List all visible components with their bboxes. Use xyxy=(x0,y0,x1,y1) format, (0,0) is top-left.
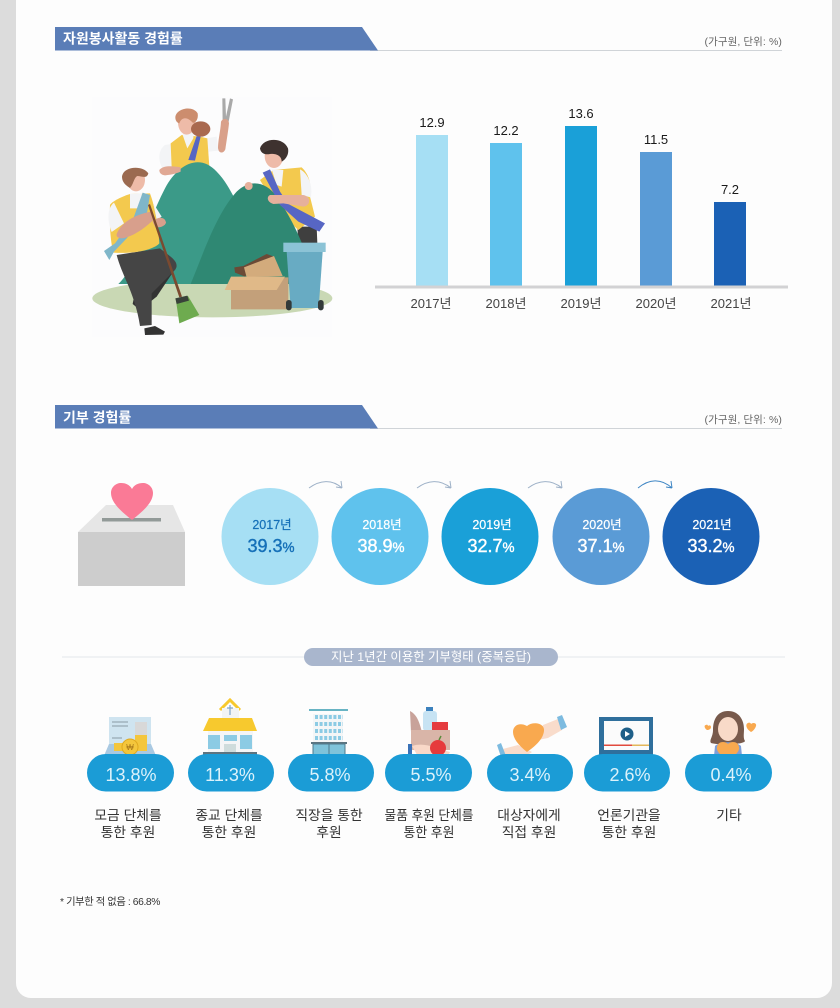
donation type labels: 언론기관을 xyxy=(597,808,661,823)
heading: donation experience rate: 기부 경험률 xyxy=(63,410,131,426)
icon: media screen xyxy=(599,717,653,757)
cardboard boxes xyxy=(225,254,288,309)
circle 2019: 2019년 xyxy=(472,518,512,532)
bar chart: volunteer rate by year xyxy=(375,106,788,311)
value labels: 12.2 xyxy=(493,123,519,138)
donation type labels: 직접 후원 xyxy=(502,825,556,840)
donation type labels: 대상자에게 xyxy=(497,808,561,823)
circle 2017 xyxy=(222,488,318,585)
year labels: 2018년 xyxy=(486,296,526,311)
volunteer: right man body xyxy=(260,140,317,243)
heading: donation experience rate: (가구원, 단위: %) xyxy=(704,413,782,426)
circle 2019: 32.7% xyxy=(467,536,515,556)
year labels xyxy=(411,296,751,311)
heading: donation experience rate xyxy=(55,405,782,428)
donation type pills with percentages: 13.8% xyxy=(105,765,157,785)
donation type labels: 직장을 통한 xyxy=(295,808,363,823)
icon: direct giving hands with heart xyxy=(497,715,567,760)
value labels: 12.9 xyxy=(419,115,445,130)
donation type pills with percentages: 2.6% xyxy=(609,765,651,785)
mound: back trash heap xyxy=(118,162,257,284)
donation type pills with percentages: 3.4% xyxy=(509,765,551,785)
circle 2018: 38.9% xyxy=(357,536,405,556)
mound: front trash heap xyxy=(191,183,303,284)
icon: other, woman with heart xyxy=(705,711,756,760)
donation type labels: 후원 xyxy=(316,825,342,840)
circle 2020: 2020년 xyxy=(582,518,622,532)
year labels: 2020년 xyxy=(636,296,676,311)
arrows between years xyxy=(309,481,672,488)
heading: volunteer experience rate: (가구원, 단위: %) xyxy=(704,35,782,48)
footnote: * 기부한 적 없음 : 66.8% xyxy=(60,895,160,908)
year labels: 2021년 xyxy=(711,296,751,311)
volunteer: top woman xyxy=(159,98,233,177)
recycling bin xyxy=(283,243,326,310)
icon: donation box with heart xyxy=(78,483,185,586)
volunteer: right man sash and arms xyxy=(245,169,325,232)
circle 2019 xyxy=(442,488,538,585)
donation type pills with percentages: 5.8% xyxy=(309,765,351,785)
subheading: donation types: 지난 1년간 이용한 기부형태 (중복응답) xyxy=(331,650,531,664)
bars xyxy=(416,126,746,286)
circle 2021 xyxy=(662,488,760,585)
circle 2017: 2017년 xyxy=(252,518,292,532)
icon: goods donation bag xyxy=(408,707,450,760)
illustration: volunteers cleaning up xyxy=(92,97,332,337)
donation type pills with percentages xyxy=(87,754,772,792)
donation type labels: 통한 후원 xyxy=(602,825,656,840)
value labels: 13.6 xyxy=(568,106,594,121)
year labels: 2019년 xyxy=(561,296,601,311)
donation type labels: 통한 후원 xyxy=(202,825,256,840)
circles: donation rate by year xyxy=(222,488,760,585)
icon: church xyxy=(203,700,257,756)
circle 2021: 33.2% xyxy=(687,536,735,556)
donation type labels: 기타 xyxy=(716,808,742,823)
volunteer: left man with broom xyxy=(104,168,199,335)
circle 2020 xyxy=(552,488,650,585)
donation type pills with percentages: 11.3% xyxy=(205,765,255,785)
donation type labels: 물품 후원 단체를 xyxy=(384,808,474,823)
icon: fundraising organization xyxy=(103,717,157,758)
heading: volunteer experience rate xyxy=(55,27,782,50)
donation type labels xyxy=(94,808,742,840)
donation type pills with percentages: 0.4% xyxy=(710,765,752,785)
donation type labels: 종교 단체를 xyxy=(195,808,263,823)
donation type labels: 모금 단체를 xyxy=(94,808,162,823)
circle 2018: 2018년 xyxy=(362,518,402,532)
donation type pills with percentages: 5.5% xyxy=(410,765,452,785)
circle 2017: 39.3% xyxy=(247,536,295,556)
value labels: 11.5 xyxy=(644,132,668,147)
volunteer hand on heap xyxy=(159,166,181,175)
year labels: 2017년 xyxy=(411,296,451,311)
circle 2021: 2021년 xyxy=(692,518,732,532)
heading: volunteer experience rate: 자원봉사활동 경험률 xyxy=(63,30,183,46)
icon: workplace building xyxy=(309,709,348,755)
subheading: donation types xyxy=(62,648,785,666)
circle 2018 xyxy=(332,488,428,585)
icon: fundraising organization: ₩ xyxy=(126,743,134,752)
donation type labels: 통한 후원 xyxy=(404,825,454,840)
value labels xyxy=(419,106,739,197)
donation type labels: 통한 후원 xyxy=(101,825,155,840)
circle 2020: 37.1% xyxy=(577,536,625,556)
value labels: 7.2 xyxy=(721,182,739,197)
